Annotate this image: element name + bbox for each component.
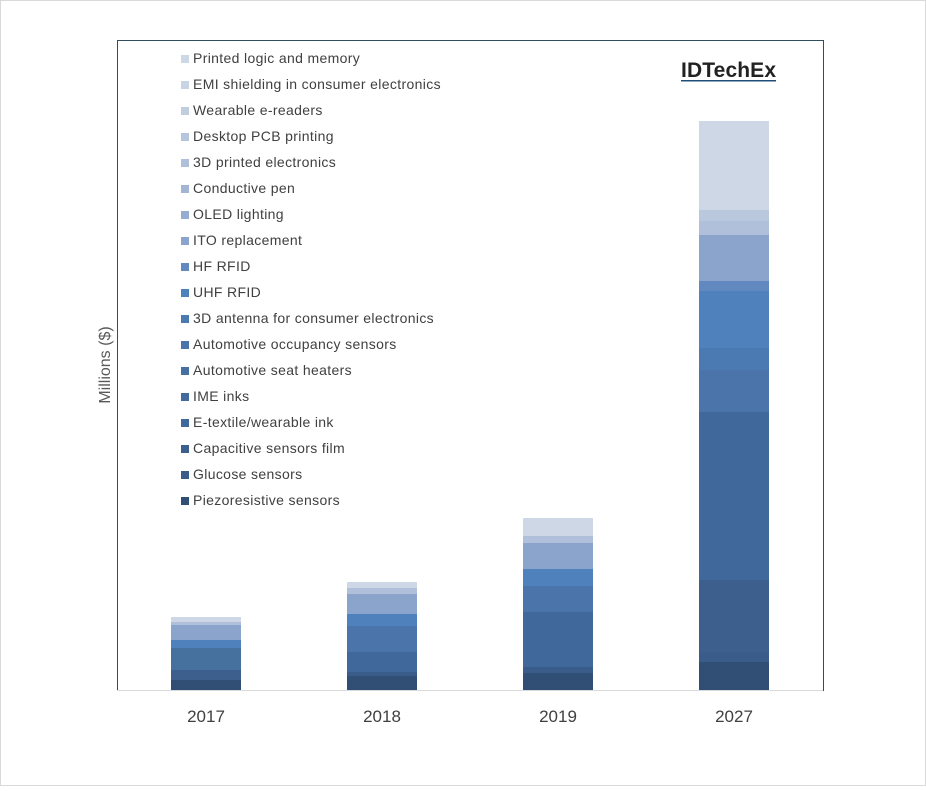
legend: Desktop PCB printing (193, 128, 334, 144)
legend: OLED lighting (193, 206, 284, 222)
x axis labels: 2019 (539, 707, 577, 726)
bar 2019 (523, 518, 593, 690)
legend: EMI shielding in consumer electronics (193, 76, 441, 92)
bar 2027 (699, 121, 769, 690)
legend: Capacitive sensors film (193, 440, 345, 456)
legend: UHF RFID (193, 284, 261, 300)
legend: Piezoresistive sensors (193, 492, 340, 508)
legend (181, 50, 441, 508)
legend: Glucose sensors (193, 466, 303, 482)
legend: IME inks (193, 388, 249, 404)
x axis labels: 2018 (363, 707, 401, 726)
legend: Conductive pen (193, 180, 295, 196)
legend: 3D printed electronics (193, 154, 336, 170)
x axis labels: 2027 (715, 707, 753, 726)
x axis labels: 2017 (187, 707, 225, 726)
legend: 3D antenna for consumer electronics (193, 310, 434, 326)
legend: Printed logic and memory (193, 50, 360, 66)
legend: HF RFID (193, 258, 251, 274)
logo: IDTechEx: IDTechEx (681, 59, 776, 82)
y axis title: Millions ($) (97, 326, 114, 404)
legend: ITO replacement (193, 232, 302, 248)
x axis labels (187, 707, 753, 726)
bar 2018 (347, 582, 417, 690)
legend: Wearable e-readers (193, 102, 323, 118)
legend: Automotive occupancy sensors (193, 336, 397, 352)
legend: E-textile/wearable ink (193, 414, 334, 430)
legend: Automotive seat heaters (193, 362, 352, 378)
plot area frame (118, 40, 824, 690)
bar 2017 (171, 617, 241, 690)
